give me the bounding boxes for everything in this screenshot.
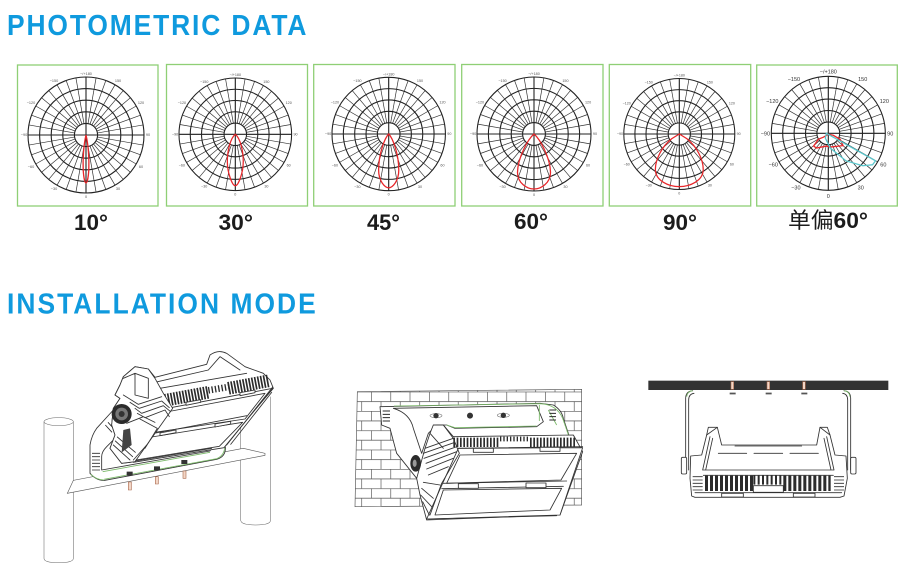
end cap detail: [421, 425, 459, 515]
bracket: [90, 410, 225, 480]
floodlight body: [380, 403, 583, 520]
lamp details: [693, 427, 844, 497]
axis labels: 150: [115, 79, 121, 83]
bolts: [731, 382, 805, 389]
axis labels: [617, 74, 741, 195]
axis labels: −120: [476, 101, 484, 105]
axis labels: 30: [563, 185, 568, 189]
axis labels: 60: [139, 165, 143, 169]
axis labels: −90: [325, 132, 331, 136]
axis labels: [21, 72, 150, 199]
label: 10 degrees: 10°: [74, 210, 108, 235]
axis labels: 120: [880, 99, 889, 105]
axis labels: −/+180: [528, 72, 540, 76]
axis labels: 120: [138, 101, 144, 105]
axis labels: −30: [499, 185, 506, 189]
floodlight body: [90, 352, 273, 490]
axis labels: 120: [439, 101, 446, 105]
heading: photometric data: PHOTOMETRIC DATA: [7, 9, 307, 41]
panel: 10 degree polar chart: [18, 65, 158, 206]
label: 60 degrees: 60°: [514, 209, 548, 234]
curve: 45 degree beam: [379, 134, 399, 188]
axis labels: 90: [146, 133, 150, 137]
axis labels: 60: [586, 163, 590, 167]
axis labels: 0: [533, 193, 535, 197]
axis labels: −/+180: [820, 69, 837, 75]
axis labels: 90: [737, 132, 741, 136]
axis labels: −120: [623, 101, 631, 105]
nuts: [730, 393, 807, 394]
axis labels: 90: [887, 131, 893, 137]
axis labels: −30: [201, 185, 207, 189]
lamp housing: [417, 425, 583, 520]
axis labels: −/+180: [80, 72, 92, 76]
right knob: [851, 457, 856, 474]
axis labels: 90: [293, 132, 298, 136]
axis labels: 120: [729, 101, 735, 105]
label: 30 degrees: 30°: [218, 210, 253, 235]
front panel: [131, 387, 273, 462]
axis labels: −150: [645, 80, 653, 84]
axis labels: 150: [707, 80, 713, 84]
axis labels: −90: [172, 132, 178, 136]
illustration: beam-mounted floodlight: [648, 381, 888, 497]
axis labels: −150: [200, 80, 208, 84]
axis labels: −120: [331, 101, 339, 105]
curve: 10 degree beam: [83, 135, 89, 183]
brick wall: [355, 389, 582, 507]
axis labels: 60: [287, 163, 291, 167]
axis labels: 0: [827, 194, 830, 200]
axis labels: −150: [50, 79, 58, 83]
panel: 90 degree polar chart: [609, 64, 751, 206]
axis labels: −/+180: [674, 74, 685, 78]
curve: offset beam: [825, 133, 875, 166]
axis labels: −150: [498, 79, 507, 83]
bracket arms: [686, 391, 851, 470]
illustration: pole-mounted floodlight: [44, 352, 273, 563]
axis labels: [325, 72, 451, 197]
axis labels: −30: [791, 185, 801, 191]
axis labels: −60: [769, 163, 778, 169]
adjustment knob: [112, 404, 132, 424]
axis labels: −150: [353, 79, 362, 83]
axis labels: −/+180: [383, 72, 394, 76]
axis labels: 150: [263, 80, 269, 84]
nuts: [127, 460, 187, 476]
axis labels: 0: [388, 193, 390, 197]
label: 45 degrees: 45°: [367, 210, 400, 235]
axis labels: 60: [440, 163, 445, 167]
poles and plate: [44, 397, 271, 563]
axis labels: −/+180: [230, 73, 241, 77]
axis labels: 60: [880, 163, 886, 169]
panel: single-sided 60 degree polar chart: [757, 65, 897, 206]
axis labels: −60: [624, 163, 630, 167]
axis labels: 150: [417, 79, 423, 83]
axis labels: 150: [562, 79, 569, 83]
axis labels: −120: [766, 99, 778, 105]
axis labels: 30: [858, 185, 864, 191]
axis labels: 30: [264, 185, 268, 189]
axis labels: 30: [708, 184, 712, 188]
axis labels: −30: [354, 185, 361, 189]
axis labels: [470, 72, 597, 197]
axis labels: [172, 73, 298, 196]
panel: 45 degree polar chart: [314, 64, 455, 206]
axis labels: 120: [585, 101, 591, 105]
axis labels: 0: [85, 195, 87, 199]
axis labels: −60: [477, 163, 483, 167]
axis labels: 0: [234, 192, 236, 196]
heat-sink fins: [453, 439, 577, 442]
heading: installation mode: INSTALLATION MODE: [7, 288, 316, 320]
axis labels: [761, 69, 893, 200]
lamp body: [690, 427, 847, 497]
axis labels: 60: [730, 163, 734, 167]
wall bracket: [380, 403, 570, 478]
illustration: wall-mounted floodlight: [355, 389, 583, 520]
axis labels: −120: [178, 101, 186, 105]
axis labels: −60: [28, 165, 34, 169]
curve: 30 degree beam: [227, 134, 243, 186]
axis labels: −90: [470, 132, 476, 136]
axis labels: −60: [332, 163, 338, 167]
axis labels: 120: [286, 101, 292, 105]
axis labels: −30: [51, 187, 57, 191]
axis labels: 90: [593, 132, 597, 136]
axis labels: 90: [447, 132, 451, 136]
front panel: [427, 447, 583, 519]
curve: 60 degree beam: [517, 134, 551, 189]
axis labels: 0: [678, 191, 680, 195]
axis labels: −90: [761, 131, 770, 137]
curve: cross-plane beam: [814, 134, 843, 148]
mounting beam: [648, 381, 888, 390]
panel: 30 degree polar chart: [166, 64, 308, 206]
axis labels: −30: [646, 184, 652, 188]
bolts: [128, 471, 186, 490]
axis labels: −150: [788, 77, 800, 83]
axis labels: 150: [858, 77, 867, 83]
axis labels: −60: [179, 163, 185, 167]
end cap detail: [110, 367, 173, 463]
label: 90 degrees: 90°: [663, 210, 697, 235]
label: single-sided 60 degrees: 单偏60°: [788, 208, 868, 233]
axis labels: 30: [418, 185, 422, 189]
lamp housing: [110, 352, 273, 463]
curve: 90 degree beam: [655, 134, 703, 187]
adjustment knob: [410, 455, 421, 472]
panel: 60 degree polar chart: [462, 64, 603, 206]
left knob: [681, 457, 687, 474]
axis labels: −90: [617, 132, 623, 136]
heat-sink fins: [165, 381, 269, 400]
axis labels: −90: [21, 133, 27, 137]
axis labels: 30: [116, 187, 120, 191]
axis labels: −120: [27, 101, 35, 105]
